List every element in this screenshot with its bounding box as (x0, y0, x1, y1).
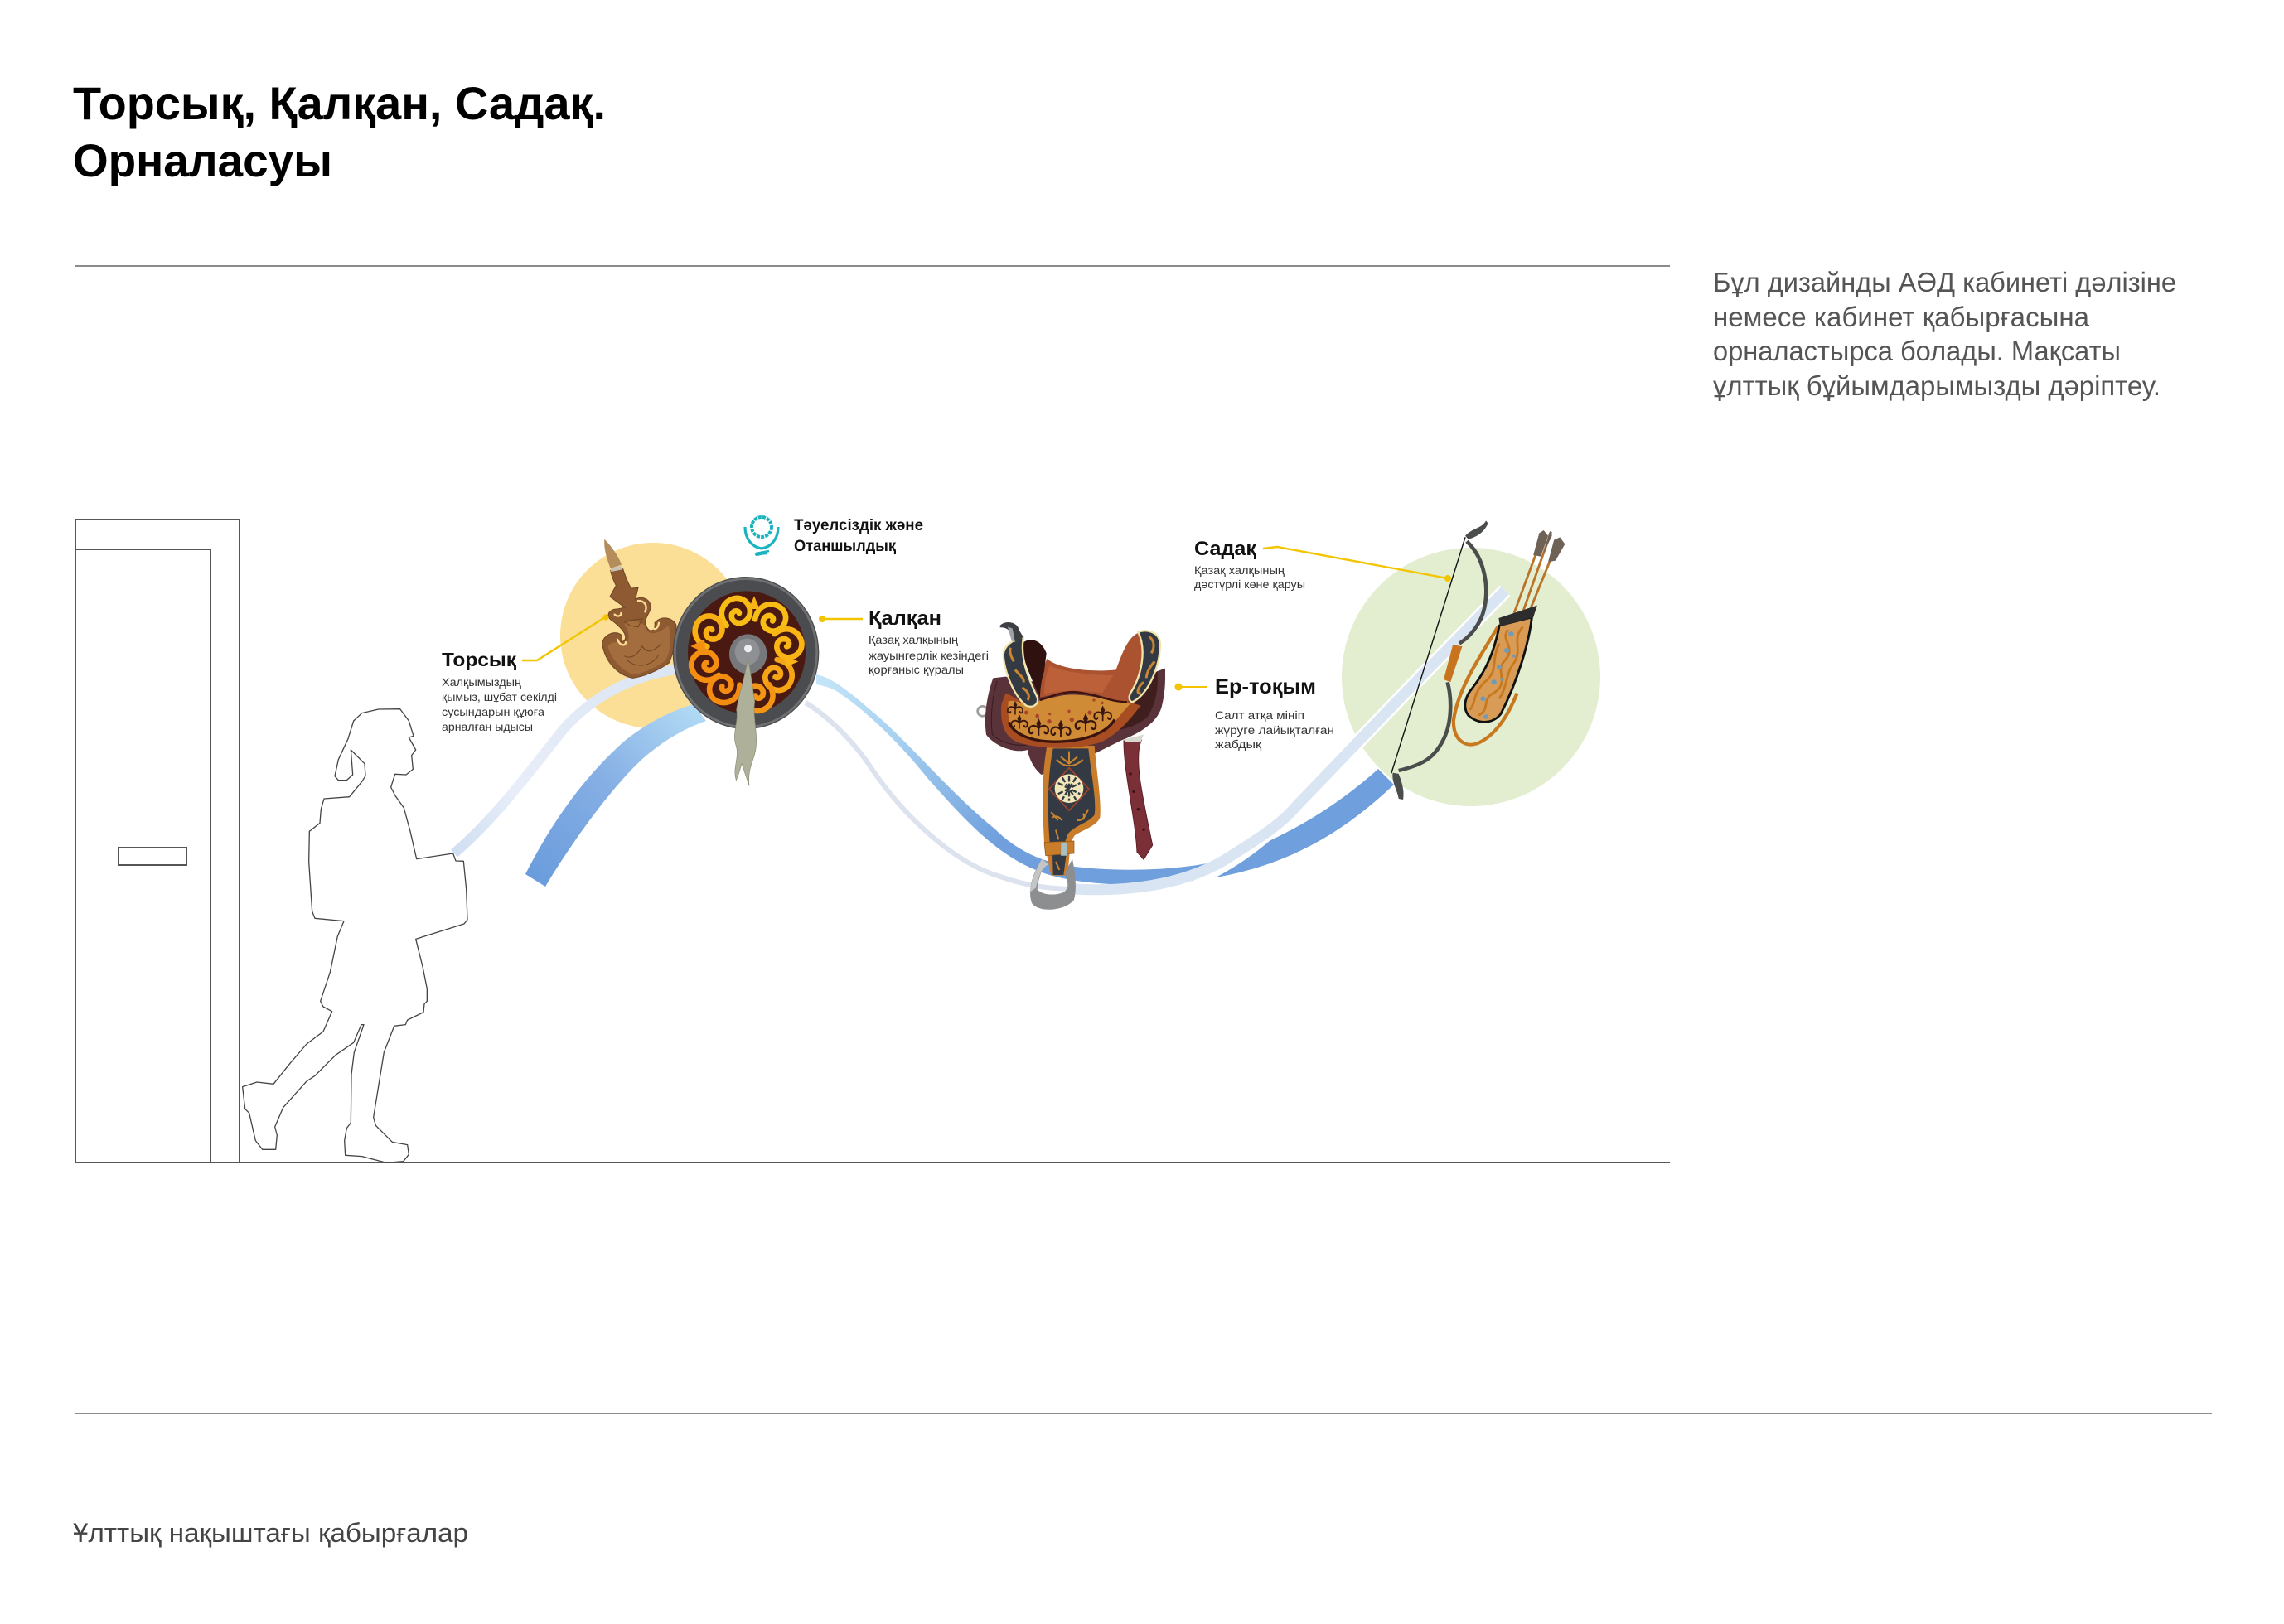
ribbon: thin light path right (806, 591, 1505, 890)
medallion (1049, 768, 1089, 810)
title: Торсық, Қалқан, Садақ. (73, 77, 606, 129)
label: Sadak: дәстүрлі көне қаруы (1194, 578, 1305, 591)
footer caption: Ұлттық нақыштағы қабырғалар (73, 1518, 468, 1548)
door and floor line (75, 520, 1670, 1162)
shield ornament (688, 594, 806, 714)
illustration: torsyk flask (602, 539, 676, 678)
label: Er-tokym: жабдық (1215, 737, 1262, 751)
title (73, 77, 606, 186)
label: independence icon and text (745, 517, 923, 555)
label: Kalkan: Қазақ халқының (869, 633, 958, 646)
label: Torsyk: қымыз, шұбат секілді (442, 690, 557, 703)
label: Torsyk: Халқымыздың (442, 675, 521, 689)
circle: green backdrop (1342, 548, 1600, 806)
label: Er-tokym: жүруге лайықталған (1215, 723, 1334, 737)
icon: teal emblem (745, 517, 778, 555)
label: Er-tokym: Салт атқа мініп (1215, 708, 1304, 722)
horn (1000, 622, 1023, 644)
text block: description: орналастырса болады. Мақсаты (1713, 336, 2121, 366)
ribbon: light path left (454, 669, 675, 853)
left panel (1004, 636, 1038, 707)
label: Torsyk (442, 615, 608, 733)
skirt (985, 669, 1165, 775)
label: Er-tokym (1175, 675, 1334, 751)
label: Sadak: Қазақ халқының (1194, 563, 1285, 577)
strap (1124, 740, 1153, 859)
ribbon: blue band right (816, 674, 1394, 885)
person silhouette (243, 709, 467, 1162)
circle: yellow backdrop (560, 543, 746, 728)
label: independence icon and text: Тәуелсіздік және (794, 517, 923, 534)
ribbon: blue band left (525, 704, 706, 887)
text block: description: ұлттық бұйымдарымызды дәріптеу. (1713, 370, 2161, 401)
label: Kalkan: қорғаныс құралы (869, 663, 964, 676)
right panel (1130, 631, 1160, 702)
illustration: quiver and arrows (1454, 530, 1565, 745)
fender (1043, 746, 1101, 876)
stirrup (1030, 859, 1076, 910)
label: Er-tokym: Ер-тоқым (1215, 675, 1316, 698)
label: independence icon and text: Отаншылдық (794, 538, 896, 555)
illustration: horsehair tassel (734, 659, 757, 785)
label: Sadak: Садақ (1194, 538, 1257, 560)
ring (978, 706, 988, 716)
label: Kalkan: Қалқан (869, 607, 941, 630)
seat, jockey and cantle (1000, 622, 1160, 748)
label: Kalkan (819, 607, 989, 676)
label: Torsyk: Торсық (442, 649, 517, 670)
label: Kalkan: жауынгерлік кезіндегі (869, 649, 989, 662)
label: Torsyk: сусындарын құюға (442, 705, 544, 718)
buckle (1044, 841, 1074, 856)
text block: description: немесе кабинет қабырғасына (1713, 302, 2090, 332)
illustration: shield (673, 577, 819, 729)
label: Sadak (1194, 538, 1451, 591)
title: Орналасуы (73, 134, 332, 186)
illustration: saddle (978, 622, 1165, 910)
illustration: bow (1391, 520, 1488, 800)
text block: description: Бұл дизайнды АӘД кабинеті дәлізіне (1713, 267, 2176, 297)
text block: description (1713, 267, 2176, 401)
label: Torsyk: арналған ыдысы (442, 720, 533, 733)
